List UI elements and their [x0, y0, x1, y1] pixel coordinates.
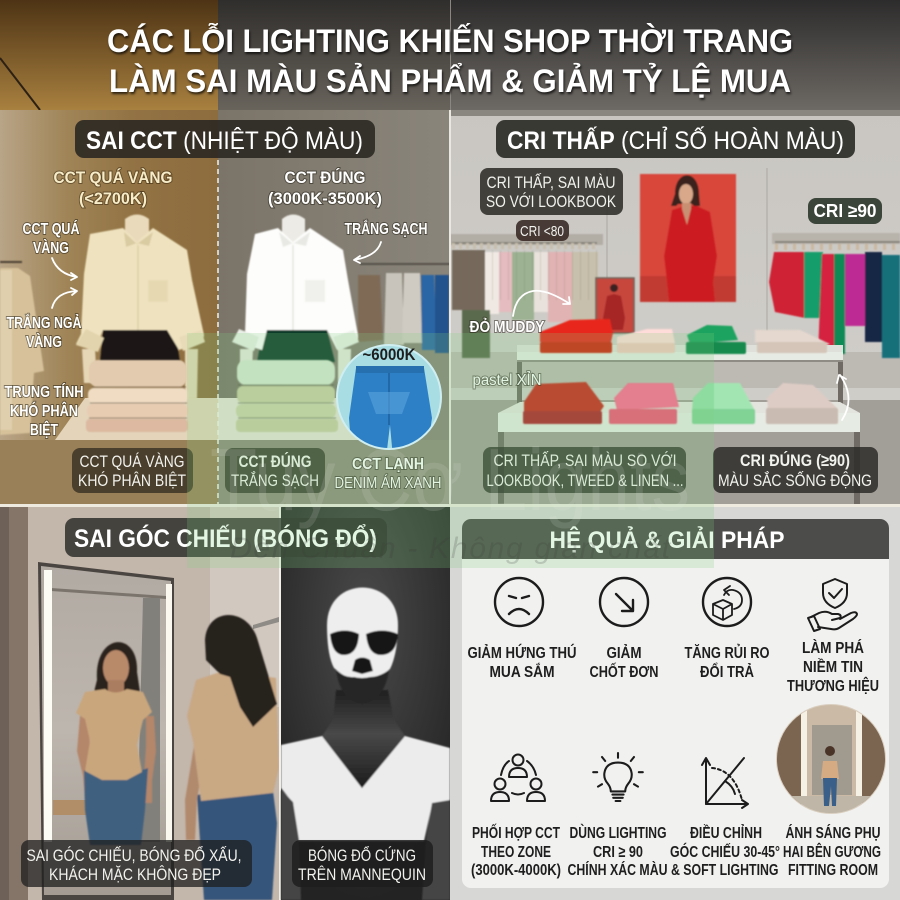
icon: down arrow — [600, 578, 648, 626]
tag CRI below 80: CRI <80 — [520, 223, 564, 240]
panel: CRI thấp — [450, 110, 900, 505]
tag lookbook: SO VỚI LOOKBOOK — [486, 192, 617, 211]
tag lookbook: CRI THẤP, SAI MÀU — [486, 173, 616, 192]
reflection — [76, 642, 156, 845]
item: adjust angle: GÓC CHIẾU 30-45° — [670, 842, 780, 861]
fitting room photo — [776, 704, 888, 814]
caption mirror — [21, 840, 252, 887]
header band — [0, 0, 900, 110]
label correct: (3000K-3500K) — [268, 189, 382, 208]
small lookbook poster — [596, 278, 634, 333]
panel: hệ quả và giải pháp — [450, 507, 900, 900]
heading: CRI THẤP (CHỈ SỐ HOÀN MÀU) — [507, 125, 844, 155]
arrow right — [837, 375, 849, 420]
caption correct — [225, 448, 325, 493]
item: lighting CRI: DÙNG LIGHTING — [570, 823, 666, 842]
denim inset — [337, 345, 441, 458]
item: fewer orders: CHỐT ĐƠN — [590, 661, 658, 681]
warm stack — [86, 360, 188, 432]
item: return risk: TĂNG RỦI RO — [684, 643, 770, 662]
caption correct: CCT ĐÚNG — [238, 452, 312, 471]
heading — [462, 519, 889, 559]
caption good CRI — [713, 447, 878, 493]
caption mirror: KHÁCH MẶC KHÔNG ĐẸP — [49, 865, 221, 884]
item: lighting CRI: CHÍNH XÁC MÀU & SOFT LIGHTING — [568, 860, 778, 879]
callout ivory — [6, 288, 82, 351]
caption mannequin: TRÊN MANNEQUIN — [298, 865, 426, 884]
heading — [75, 120, 375, 158]
item: return risk: ĐỔI TRẢ — [700, 662, 754, 681]
right rail with clothes — [769, 233, 900, 358]
callout neutrals: TRUNG TÍNH — [4, 382, 84, 401]
title — [107, 23, 793, 99]
label warm: CCT QUÁ VÀNG — [54, 168, 172, 187]
item: lighting CRI: CRI ≥ 90 — [593, 844, 643, 861]
tag CRI 90: CRI ≥90 — [814, 201, 876, 221]
callout too yellow: CCT QUÁ — [22, 219, 80, 238]
rack of neutral clothes — [358, 264, 450, 353]
icon: shield in hand — [808, 579, 857, 631]
watermark: Tuy Cơ Lights — [210, 430, 690, 529]
item: less interest: GIẢM HỨNG THÚ — [468, 643, 576, 662]
heading — [496, 120, 855, 158]
customer from behind — [185, 615, 279, 900]
upper table — [517, 345, 843, 417]
mannequin correct — [232, 214, 359, 389]
callout neutrals: KHÓ PHÂN — [10, 401, 78, 420]
mannequin warm — [76, 214, 205, 399]
warm and neutral backdrop — [0, 110, 450, 505]
item: CCT zones: (3000K-4000K) — [471, 862, 561, 879]
item: lighting CRI — [568, 823, 778, 879]
divider — [217, 160, 219, 505]
mirror — [38, 562, 174, 900]
caption low CRI — [483, 447, 686, 493]
label warm — [54, 168, 172, 208]
item: less interest — [468, 643, 576, 681]
item: return risk — [684, 643, 770, 681]
caption low CRI: CRI THẤP, SAI MÀU SO VỚI — [494, 451, 676, 470]
icon: sad face — [495, 578, 543, 626]
store backdrop — [450, 110, 900, 505]
callout too yellow: VÀNG — [33, 238, 69, 257]
label correct: CCT ĐÚNG — [284, 168, 366, 187]
caption warm — [72, 448, 193, 493]
neutral stack — [236, 360, 338, 432]
icon: angle — [702, 758, 748, 808]
caption mirror: SAI GÓC CHIẾU, BÓNG ĐỔ XẤU, — [26, 846, 242, 865]
mannequin scene — [279, 507, 450, 900]
callout clean white: TRẮNG SẠCH — [344, 219, 428, 238]
callout pastel: pastel XỈN — [472, 370, 542, 389]
caption cold: CCT LẠNH — [352, 456, 424, 473]
callout neutrals — [4, 382, 84, 439]
item: brand trust — [787, 638, 879, 695]
tag lookbook — [480, 168, 623, 215]
lower table — [498, 402, 860, 505]
fitting room wall — [0, 507, 279, 900]
item: fewer orders — [590, 643, 658, 681]
label warm: (<2700K) — [79, 189, 147, 208]
upper stacks — [540, 319, 830, 354]
caption warm: KHÓ PHÂN BIỆT — [78, 471, 186, 490]
large lookbook poster — [640, 174, 736, 302]
icon: people zones — [491, 754, 545, 801]
caption cold: DENIM ÁM XANH — [334, 473, 442, 492]
callout clean white — [344, 219, 428, 263]
icon: light bulb — [593, 753, 643, 801]
card — [462, 519, 889, 888]
callout ivory: TRẮNG NGẢ — [6, 313, 82, 332]
caption mannequin: BÓNG ĐỔ CỨNG — [308, 846, 416, 865]
tag CRI below 80 — [516, 220, 569, 241]
caption correct: TRẮNG SẠCH — [231, 471, 319, 490]
callout muddy red: ĐỎ MUDDY — [470, 317, 545, 336]
title: LÀM SAI MÀU SẢN PHẨM & GIẢM TỶ LỆ MUA — [109, 63, 791, 99]
watermark — [187, 333, 714, 568]
callout muddy red — [470, 291, 570, 336]
item: adjust angle: ĐIỀU CHỈNH — [690, 823, 762, 842]
tag CRI 90 — [808, 198, 882, 224]
watermark: Đèn Chuẩn - Không gian chất — [230, 532, 672, 565]
panel dividers — [0, 110, 900, 507]
item: mirror side lights — [783, 823, 881, 879]
table — [55, 398, 390, 440]
heading: HỆ QUẢ & GIẢI PHÁP — [550, 525, 784, 554]
callout ivory: VÀNG — [26, 332, 62, 351]
caption good CRI: CRI ĐÚNG (≥90) — [740, 451, 850, 470]
panel: sai góc chiếu — [0, 507, 450, 900]
item: brand trust: NIỀM TIN — [803, 657, 863, 676]
caption low CRI: LOOKBOOK, TWEED & LINEN ... — [486, 471, 684, 490]
heading: SAI GÓC CHIẾU (BÓNG ĐỔ) — [74, 523, 377, 553]
panel: sai CCT — [0, 110, 450, 505]
title: CÁC LỖI LIGHTING KHIẾN SHOP THỜI TRANG — [107, 23, 793, 59]
item: CCT zones: THEO ZONE — [481, 844, 551, 861]
lower stacks — [523, 382, 838, 424]
heading: SAI CCT (NHIỆT ĐỘ MÀU) — [86, 126, 363, 155]
item: CCT zones — [471, 822, 561, 879]
icon: box return — [703, 578, 751, 626]
item: CCT zones: PHỐI HỢP CCT — [472, 822, 560, 842]
callout neutrals: BIỆT — [30, 420, 58, 439]
rack of warm clothes — [0, 262, 44, 435]
left rail with clothes — [450, 234, 603, 358]
label correct — [268, 168, 382, 208]
callout too yellow — [22, 219, 80, 280]
item: brand trust: LÀM PHÁ — [802, 638, 864, 657]
caption warm: CCT QUÁ VÀNG — [80, 452, 184, 471]
item: less interest: MUA SẮM — [490, 662, 554, 681]
heading — [65, 518, 387, 557]
item: fewer orders: GIẢM — [606, 643, 642, 662]
caption mannequin — [292, 840, 433, 887]
item: brand trust: THƯƠNG HIỆU — [787, 676, 879, 695]
caption cold — [334, 456, 442, 492]
item: adjust angle — [670, 823, 780, 861]
label 6000K: ~6000K — [362, 345, 416, 364]
